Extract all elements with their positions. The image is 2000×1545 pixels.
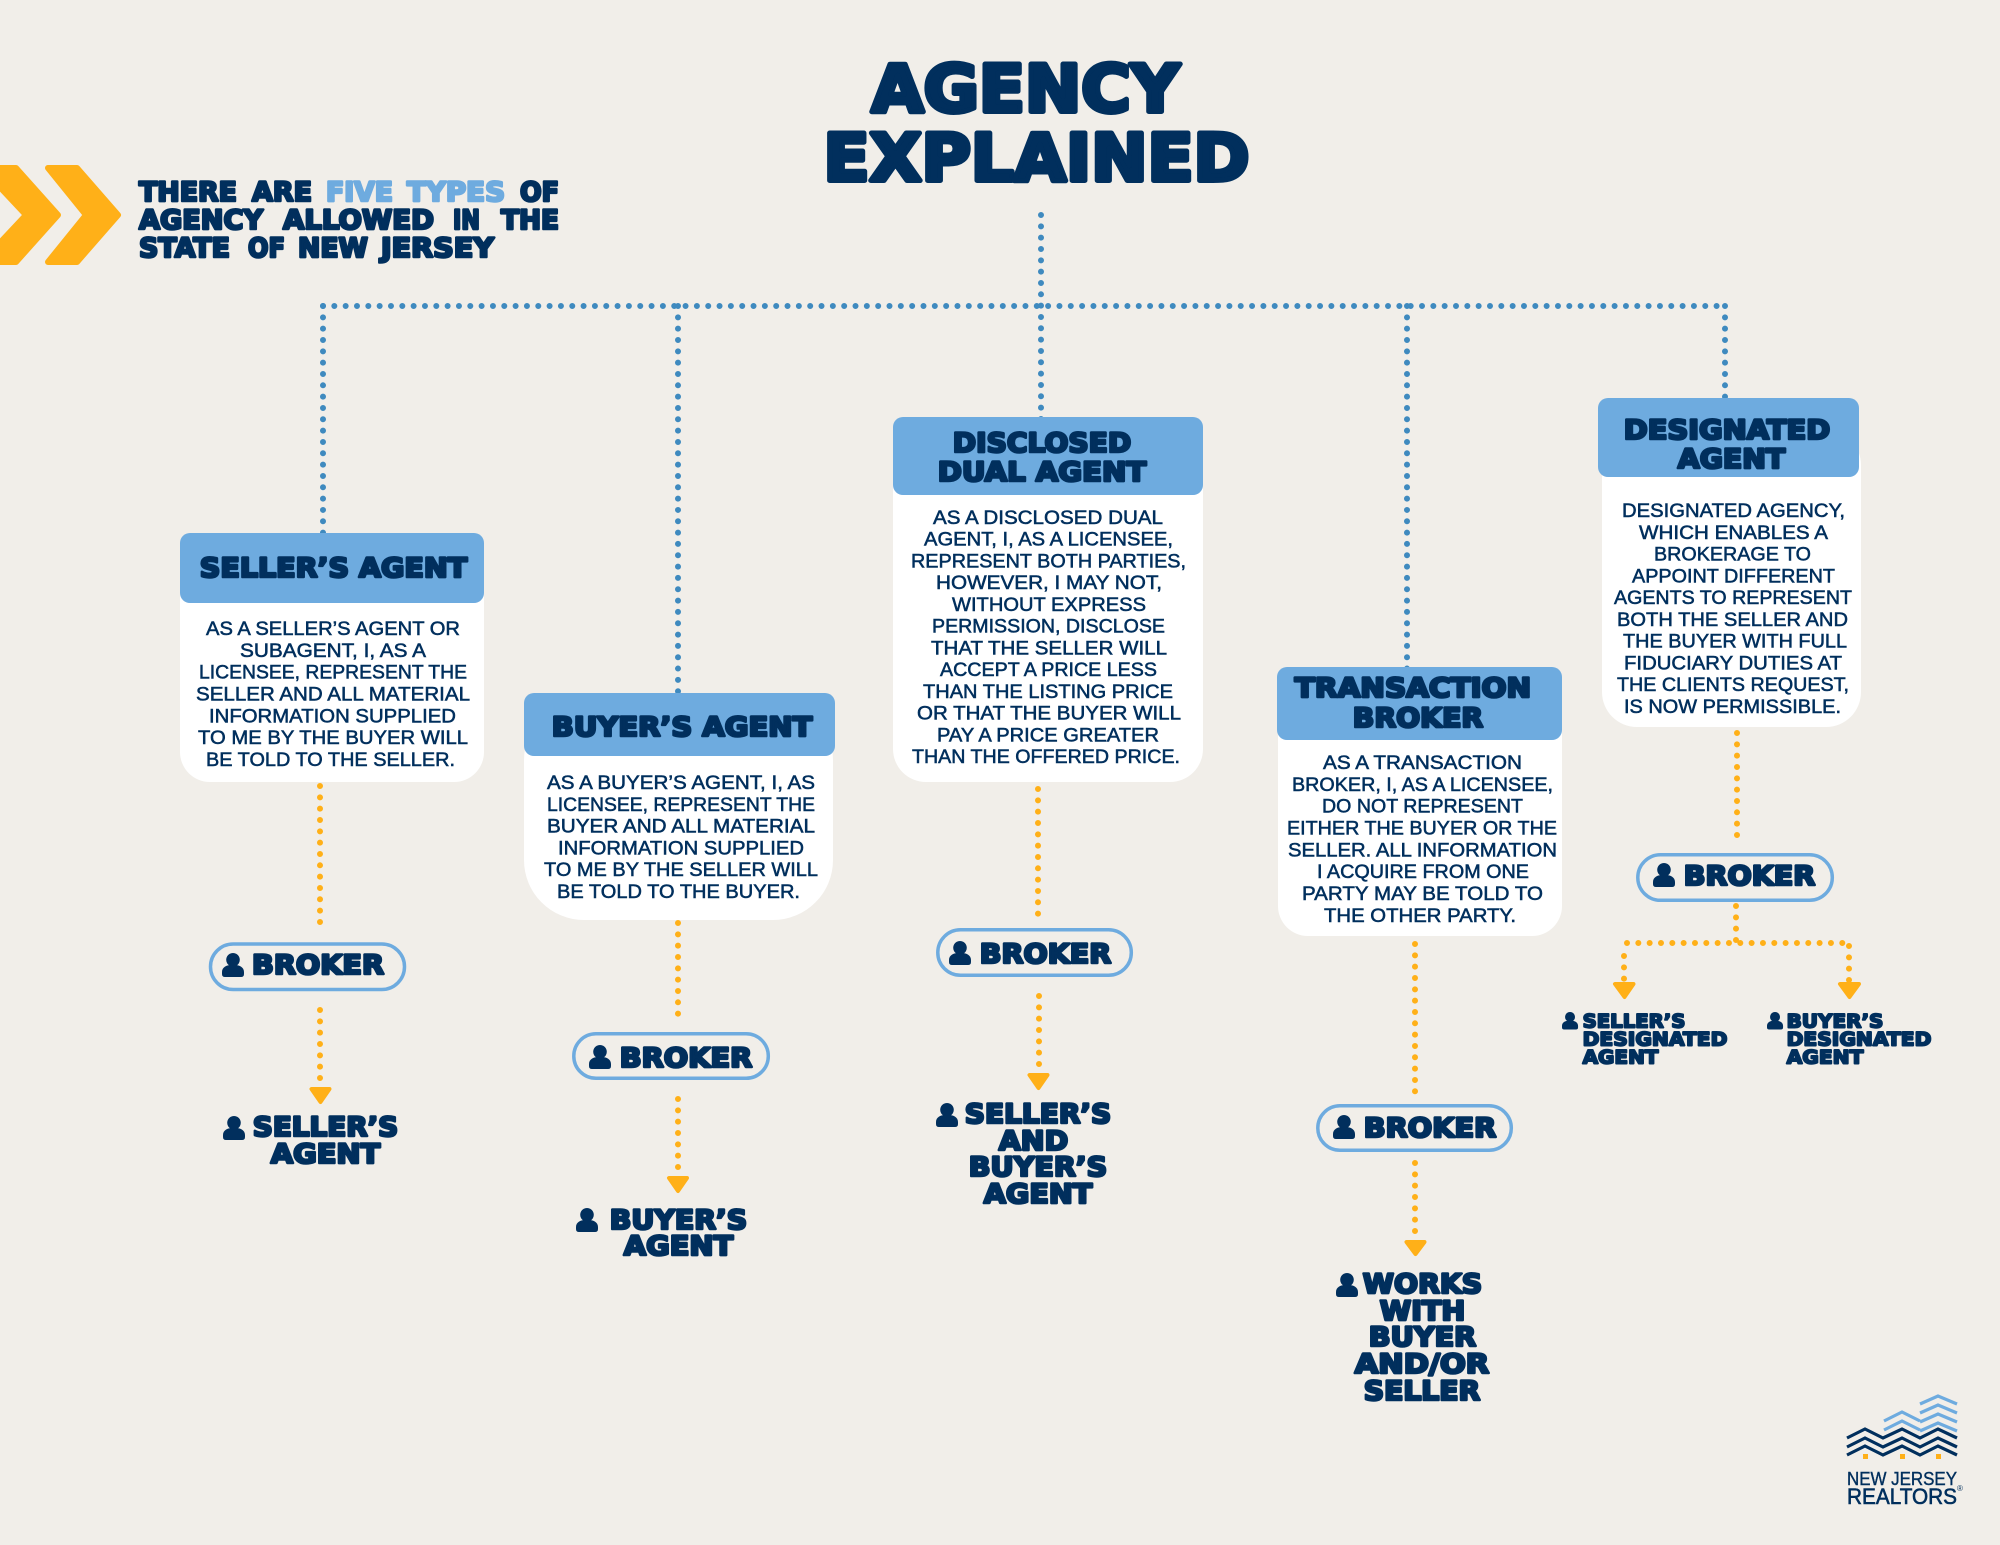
logo: New Jersey Realtors: [1847, 1396, 1963, 1509]
card body: [893, 430, 1203, 782]
agent label: [1336, 1269, 1489, 1407]
broker pill: [1318, 1106, 1511, 1150]
broker pill: [1638, 855, 1832, 900]
intro text: THE: [501, 205, 559, 236]
label: buyer's designated agent: [1767, 1010, 1931, 1068]
heading: BUYER’S AGENT: [552, 712, 813, 743]
label: buyer's designated agent: AGENT: [1787, 1046, 1863, 1068]
description: TO ME BY THE SELLER WILL: [544, 859, 818, 881]
label: seller's designated agent: DESIGNATED: [1583, 1028, 1727, 1050]
description: AS A BUYER’S AGENT, I, AS: [547, 772, 815, 794]
card header: [1277, 667, 1562, 740]
agent label: WORKS: [1363, 1269, 1482, 1300]
arrow: [1030, 1075, 1048, 1088]
intro text: OF: [520, 177, 559, 208]
description: THE OTHER PARTY.: [1324, 905, 1516, 927]
connector: card to broker: [1734, 733, 1740, 838]
description: DO NOT REPRESENT: [1322, 796, 1523, 818]
intro text: THERE: [139, 177, 237, 208]
panel: designated agent: [1562, 398, 1931, 1068]
panel: disclosed dual agent: [893, 417, 1203, 1210]
heading: SELLER’S AGENT: [200, 553, 468, 584]
connector: card to broker: [317, 786, 323, 923]
heading: [938, 428, 1147, 488]
heading: AGENT: [1678, 444, 1786, 475]
title: AGENCY: [872, 52, 1180, 128]
agent label: BUYER’S: [969, 1152, 1107, 1183]
broker pill: [938, 930, 1131, 975]
intro text: ARE: [252, 177, 312, 208]
description: THAN THE OFFERED PRICE.: [912, 746, 1180, 768]
description: THAT THE SELLER WILL: [931, 637, 1167, 659]
description: WHICH ENABLES A: [1639, 522, 1828, 544]
intro text: OF: [248, 233, 285, 264]
card body: [180, 560, 484, 782]
card body: [524, 700, 833, 920]
description: [911, 507, 1186, 768]
broker pill: BROKER: [1364, 1113, 1496, 1144]
description: SELLER. ALL INFORMATION: [1288, 839, 1557, 861]
connector: broker split: [1624, 906, 1849, 981]
intro text: IN: [453, 205, 480, 236]
agent label: AND: [999, 1126, 1068, 1157]
description: BROKERAGE TO: [1654, 544, 1811, 566]
agent label: BUYER’S: [610, 1205, 747, 1236]
description: BE TOLD TO THE SELLER.: [206, 749, 455, 771]
heading: [1624, 415, 1830, 475]
description: REPRESENT BOTH PARTIES,: [911, 550, 1186, 572]
label: buyer's designated agent: BUYER’S: [1787, 1010, 1883, 1032]
description: BE TOLD TO THE BUYER.: [557, 881, 800, 903]
connector: broker to agent: [675, 1099, 681, 1168]
panel: buyer's agent: [524, 693, 835, 1262]
panel: transaction broker: [1277, 667, 1562, 1407]
description: INFORMATION SUPPLIED: [558, 837, 804, 859]
agent label: AGENT: [271, 1139, 381, 1170]
connector: card to broker: [675, 923, 681, 1015]
description: AS A TRANSACTION: [1323, 752, 1522, 774]
icon: double chevron: [0, 168, 118, 262]
description: AGENTS TO REPRESENT: [1614, 587, 1852, 609]
intro text: ALLOWED: [283, 205, 434, 236]
description: PAY A PRICE GREATER: [937, 724, 1159, 746]
connector: top tree: [323, 215, 1726, 700]
description: BUYER AND ALL MATERIAL: [547, 816, 815, 838]
arrow: [1406, 1242, 1424, 1254]
heading: TRANSACTION: [1295, 673, 1531, 704]
heading: DESIGNATED: [1624, 415, 1830, 446]
logo mark: [1847, 1396, 1957, 1459]
broker pill: BROKER: [620, 1043, 752, 1074]
description: [1614, 500, 1852, 718]
agent label: WITH: [1380, 1296, 1465, 1327]
card header: [180, 533, 484, 603]
description: BOTH THE SELLER AND: [1617, 609, 1848, 631]
description: [1287, 752, 1557, 927]
title: [824, 52, 1250, 196]
intro text: NEW: [298, 233, 368, 264]
broker pill: [574, 1034, 768, 1078]
agent label: [576, 1205, 747, 1262]
agent label: AGENT: [624, 1231, 734, 1262]
agent label: AND/OR: [1355, 1349, 1489, 1380]
agent label: [936, 1099, 1111, 1210]
description: THE CLIENTS REQUEST,: [1617, 674, 1849, 696]
agent label: SELLER: [1364, 1376, 1480, 1407]
description: SUBAGENT, I, AS A: [240, 640, 426, 662]
description: INFORMATION SUPPLIED: [209, 705, 456, 727]
description: FIDUCIARY DUTIES AT: [1624, 652, 1842, 674]
description: AS A SELLER’S AGENT OR: [206, 618, 460, 640]
description: AGENT, I, AS A LICENSEE,: [924, 529, 1173, 551]
connector: broker to agent: [317, 1010, 323, 1079]
label: seller's designated agent: [1562, 1010, 1727, 1068]
description: DESIGNATED AGENCY,: [1622, 500, 1845, 522]
description: OR THAT THE BUYER WILL: [917, 703, 1181, 725]
description: [196, 618, 470, 771]
arrow: [669, 1178, 687, 1191]
label: seller's designated agent: SELLER’S: [1583, 1010, 1685, 1032]
logo wordmark: NEW JERSEY: [1847, 1468, 1957, 1489]
agent label: [223, 1112, 398, 1170]
logo wordmark: ®: [1957, 1484, 1963, 1493]
heading: [1295, 673, 1531, 734]
description: TO ME BY THE BUYER WILL: [198, 727, 468, 749]
intro text: JERSEY: [379, 233, 494, 264]
card header: [893, 417, 1203, 495]
agent label: SELLER’S: [965, 1099, 1111, 1130]
label: buyer's designated agent: DESIGNATED: [1787, 1028, 1931, 1050]
description: SELLER AND ALL MATERIAL: [196, 684, 470, 706]
intro text: TYPES: [407, 177, 505, 208]
broker pill: BROKER: [1684, 861, 1815, 892]
logo wordmark: REALTORS: [1847, 1484, 1957, 1509]
card body: [1278, 680, 1562, 936]
intro text: [139, 177, 559, 264]
description: LICENSEE, REPRESENT THE: [199, 662, 467, 684]
description: PERMISSION, DISCLOSE: [932, 616, 1165, 638]
arrow: right: [1840, 984, 1859, 997]
card header: [1598, 398, 1859, 477]
connector: card to broker: [1035, 789, 1041, 915]
panel: seller's agent: [180, 533, 484, 1170]
description: LICENSEE, REPRESENT THE: [547, 794, 815, 816]
intro text: FIVE: [326, 177, 393, 208]
broker pill: BROKER: [980, 939, 1111, 970]
description: WITHOUT EXPRESS: [952, 594, 1146, 616]
broker pill: [210, 944, 404, 990]
heading: DISCLOSED: [953, 428, 1131, 459]
description: [544, 772, 818, 903]
description: APPOINT DIFFERENT: [1632, 565, 1835, 587]
card header: [524, 693, 835, 756]
intro text: STATE: [139, 233, 230, 264]
heading: DUAL AGENT: [938, 457, 1147, 488]
description: HOWEVER, I MAY NOT,: [936, 572, 1162, 594]
description: AS A DISCLOSED DUAL: [933, 507, 1163, 529]
connector: card to broker: [1412, 944, 1418, 1094]
description: I ACQUIRE FROM ONE: [1317, 861, 1529, 883]
connector: broker to agent: [1036, 996, 1042, 1065]
agent label: SELLER’S: [253, 1112, 398, 1143]
logo wordmark: [1847, 1468, 1963, 1509]
arrow: left: [1615, 984, 1634, 997]
description: PARTY MAY BE TOLD TO: [1302, 883, 1543, 905]
intro text: AGENCY: [139, 205, 263, 236]
arrow: [312, 1089, 330, 1102]
agent label: BUYER: [1369, 1322, 1476, 1353]
broker pill: BROKER: [252, 950, 384, 981]
connector: broker to agent: [1412, 1163, 1418, 1232]
title: EXPLAINED: [824, 122, 1250, 196]
heading: BROKER: [1353, 703, 1483, 734]
description: IS NOW PERMISSIBLE.: [1624, 696, 1841, 718]
description: THE BUYER WITH FULL: [1623, 631, 1847, 653]
description: ACCEPT A PRICE LESS: [940, 659, 1157, 681]
description: THAN THE LISTING PRICE: [923, 681, 1173, 703]
agent label: AGENT: [984, 1179, 1093, 1210]
description: BROKER, I, AS A LICENSEE,: [1292, 774, 1553, 796]
label: seller's designated agent: AGENT: [1583, 1046, 1658, 1068]
description: EITHER THE BUYER OR THE: [1287, 818, 1557, 840]
card body: [1602, 430, 1861, 727]
